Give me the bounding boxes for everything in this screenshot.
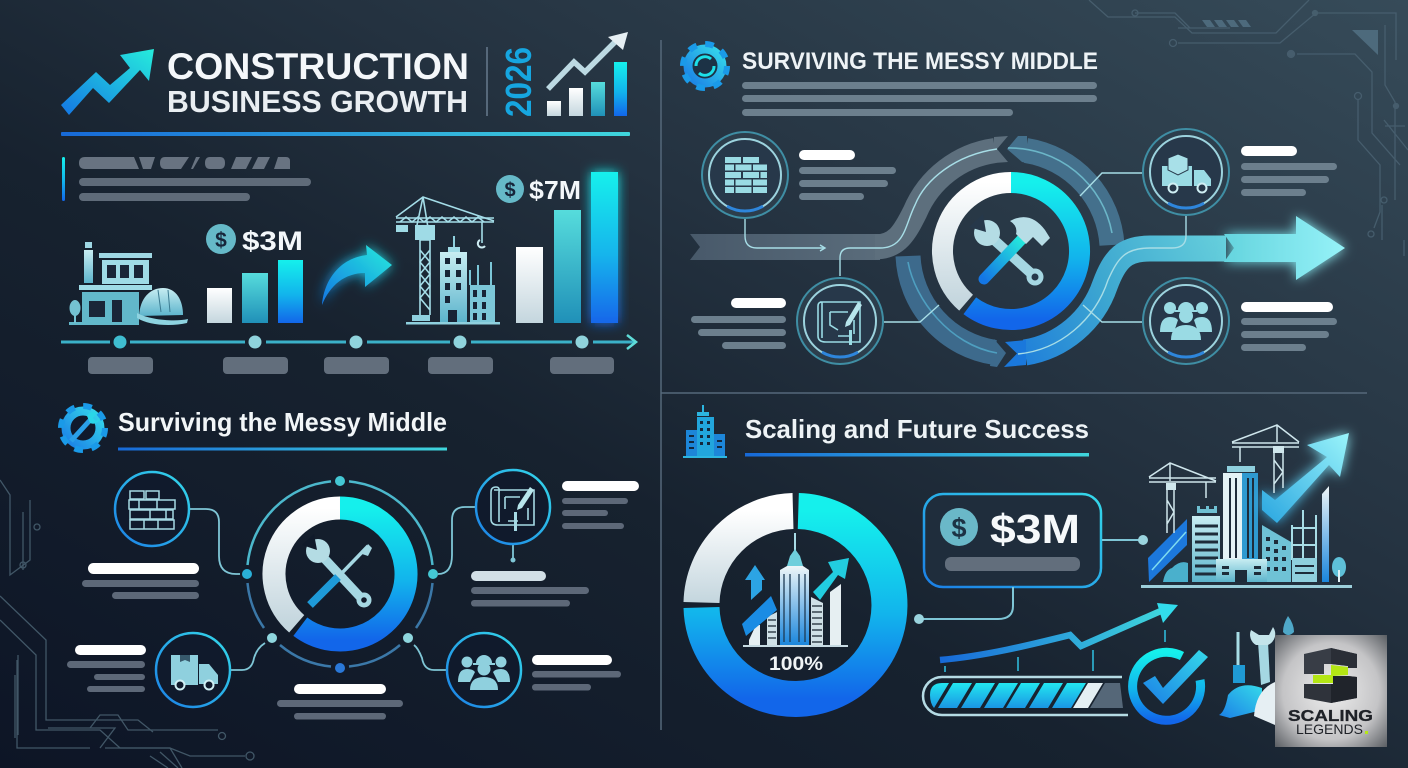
connector lines [745, 149, 1186, 354]
icon: dollar coin: $ [951, 513, 967, 543]
outer ring: top right arc [1007, 136, 1112, 245]
icon: city skyline with arrow [1141, 425, 1352, 588]
icon: wrench and hammer [969, 214, 1050, 286]
node: delivery truck [156, 633, 230, 707]
label: brick wall [82, 563, 199, 599]
outer ring with nodes [242, 476, 438, 673]
node: brick wall [702, 132, 788, 218]
icon: dollar coin [940, 508, 978, 546]
icon: tower crane and buildings [396, 197, 500, 324]
glowing arrow [1224, 216, 1345, 280]
icon: office building [683, 405, 727, 458]
icon: mini bar chart with arrow [547, 32, 628, 116]
progress bar [923, 677, 1128, 715]
node: delivery truck [1143, 129, 1229, 215]
grey ribbon [690, 136, 1008, 260]
heading underline [745, 453, 1089, 456]
node: blueprint [476, 470, 550, 544]
value: 100%: 100% [769, 654, 823, 675]
icon: circuit triangle [1352, 30, 1378, 55]
icon: gear with wrench [61, 406, 105, 450]
icon: skyscraper with arrows [742, 533, 849, 647]
value card: $3M [924, 494, 1101, 587]
year divider [486, 47, 488, 116]
icon: construction tools [1219, 616, 1294, 725]
label: workers [532, 655, 621, 690]
label: delivery truck [67, 645, 146, 692]
teal ribbon [1004, 248, 1226, 367]
icon: gear with refresh arrows [683, 44, 727, 88]
label: workers [1241, 302, 1337, 351]
heading underline [118, 448, 447, 450]
intro text placeholder [742, 82, 1097, 116]
icon: growth arrow [61, 49, 154, 115]
value: $3M: $3M [242, 226, 303, 256]
connector lines [923, 540, 1143, 619]
bar chart: $3M [206, 224, 303, 323]
logo mark [1304, 648, 1357, 703]
icon: dollar coin [496, 175, 524, 203]
label: centre [277, 684, 403, 720]
node: brick wall [115, 472, 189, 546]
icon: dollar coin: $ [504, 180, 516, 202]
node: workers [1143, 278, 1229, 364]
hatch decoration [1202, 20, 1251, 27]
logo: scaling legends [1275, 635, 1387, 747]
label: delivery truck [1241, 146, 1337, 196]
donut: progress ring [943, 182, 1080, 319]
node: blueprint [797, 278, 883, 364]
heading: Scaling and Future Success [745, 414, 1089, 444]
icon: dollar coin: $ [215, 229, 227, 252]
bar chart: $7M [496, 172, 618, 323]
value: $3M: $3M [990, 506, 1080, 552]
connector lines [189, 507, 513, 670]
label: blueprint [691, 298, 786, 349]
icon: wrench and screwdriver [302, 534, 372, 608]
intro text placeholder [62, 157, 311, 201]
heading: construction: CONSTRUCTION [167, 46, 469, 87]
outer ring: bottom left arc [908, 256, 1006, 367]
heading: business growth: BUSINESS GROWTH [167, 84, 468, 119]
label: blueprint [562, 481, 639, 529]
icon: curved growth arrow [322, 245, 392, 305]
year 2026: 2026 [498, 47, 539, 117]
timeline [61, 335, 636, 374]
panel: scaling and future success [683, 405, 1352, 725]
logo text: scaling: SCALING [1288, 708, 1373, 725]
donut: 100 percent [702, 511, 889, 699]
panel: surviving the messy middle (bottom left) [61, 406, 639, 720]
value: $7M: $7M [529, 175, 581, 205]
icon: small factory and helmet [69, 242, 188, 325]
panel: construction business growth [61, 32, 636, 374]
header underline [61, 132, 630, 136]
heading: Surviving the Messy Middle [118, 407, 447, 437]
node: workers [447, 633, 521, 707]
logo text: legends: LEGENDS [1296, 721, 1363, 737]
logo dot [1365, 731, 1368, 734]
title block [61, 32, 628, 119]
label: brick wall [799, 150, 896, 200]
label: blueprint detail [471, 571, 589, 606]
heading: SURVIVING THE MESSY MIDDLE [742, 48, 1098, 75]
trend arrow [940, 603, 1178, 672]
donut: progress ring [274, 508, 406, 640]
panel: surviving the messy middle (top right) [683, 44, 1345, 367]
icon: check mark badge [1133, 650, 1208, 720]
